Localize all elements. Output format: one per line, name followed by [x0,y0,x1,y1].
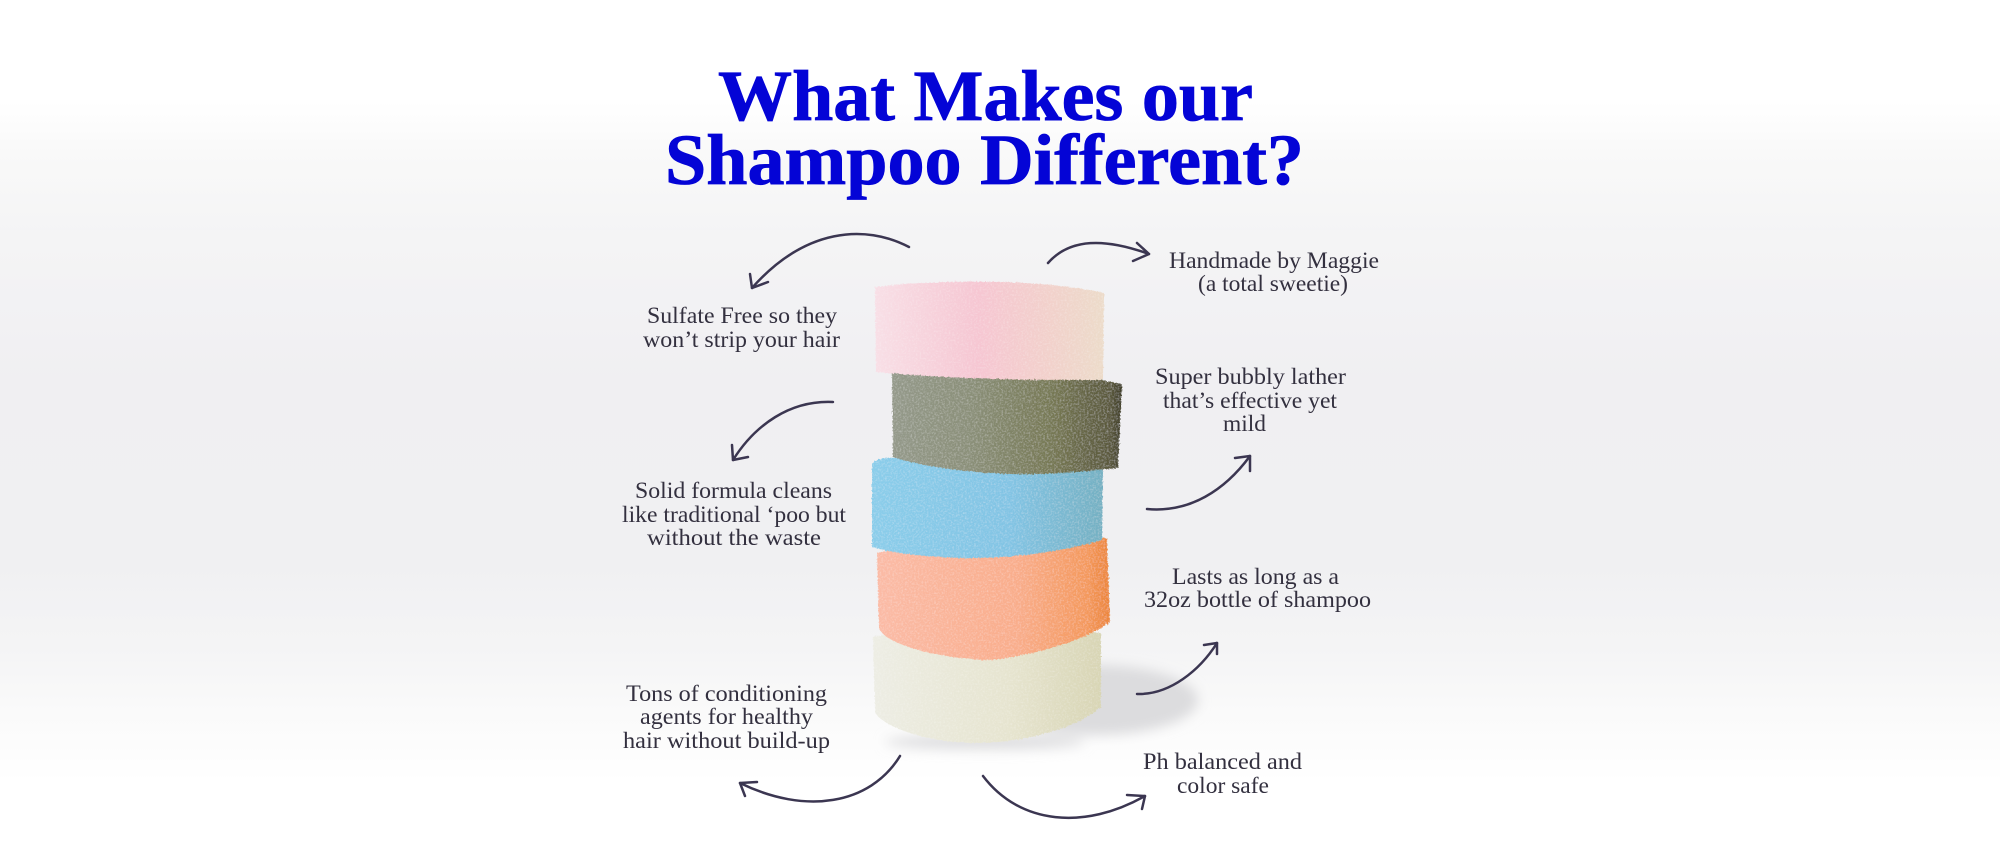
callout: lasts as long: Lasts as long as a [1172,564,1339,589]
title: Shampoo Different? [665,120,1304,200]
callout: bubbly lather: Super bubbly lather [1155,364,1346,389]
arrow [1137,643,1217,694]
blue bar [872,458,1103,558]
arrow [750,234,909,288]
callout: lasts as long [1137,564,1371,694]
arrow [740,756,900,801]
callout: ph balanced: Ph balanced and [1143,749,1303,774]
callout: bubbly lather: that’s effective yet [1163,388,1338,413]
title [665,56,1304,200]
title: What Makes our [718,56,1253,136]
arrow [1048,243,1149,263]
product: stack of shampoo bars [872,282,1198,749]
callout: handmade [1048,243,1379,296]
callout: conditioning agents: hair without build-up [623,728,830,753]
cream bar [873,629,1101,743]
pink bar [875,282,1104,380]
callout: lasts as long: 32oz bottle of shampoo [1144,587,1371,612]
arrow [732,402,833,460]
callout: solid formula [622,402,847,550]
callout: ph balanced [983,749,1303,818]
callout: sulfate free: won’t strip your hair [643,327,840,352]
callout: sulfate free [643,234,909,352]
callout: bubbly lather [1147,364,1346,509]
green bar [892,370,1122,474]
orange bar [877,538,1110,660]
bar shadow [885,665,1198,749]
callout: conditioning agents: agents for healthy [640,704,814,729]
callout: bubbly lather: mild [1223,411,1267,436]
arrow [983,776,1145,818]
arrow [1147,456,1250,509]
callout: sulfate free: Sulfate Free so they [647,303,838,328]
callout: handmade: Handmade by Maggie [1169,248,1379,273]
callout: solid formula: like traditional ‘poo but [622,502,847,527]
callout: solid formula: without the waste [647,525,821,550]
callout: handmade: (a total sweetie) [1198,271,1348,296]
callout: solid formula: Solid formula cleans [635,478,832,503]
callout: conditioning agents [623,681,900,801]
callout: conditioning agents: Tons of conditioning [626,681,828,706]
callout: ph balanced: color safe [1177,773,1269,798]
